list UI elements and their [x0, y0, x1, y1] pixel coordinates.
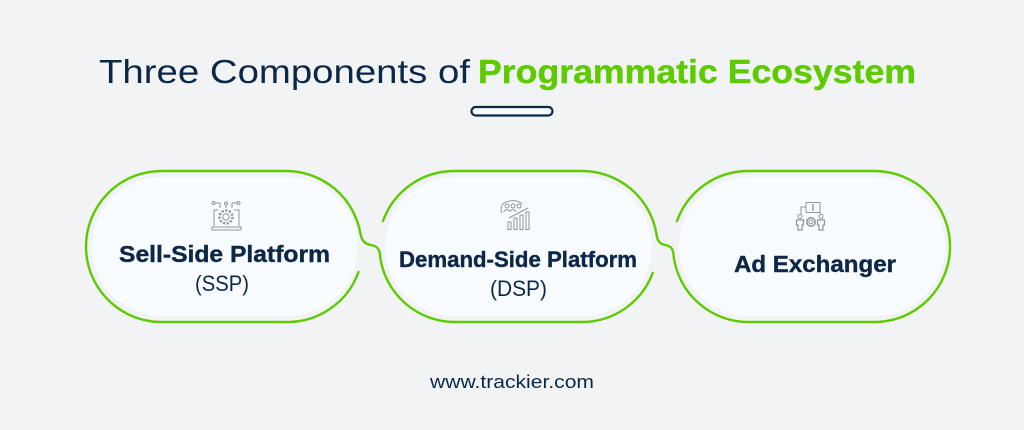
website footer: www.trackier.com	[429, 372, 594, 392]
panel: demand-side platform	[385, 177, 652, 316]
title: Three Components of	[99, 53, 471, 90]
connected green outline	[86, 171, 950, 322]
panel fill	[679, 177, 945, 316]
heading: Ad Exchanger	[734, 251, 896, 277]
heading: Sell-Side Platform	[119, 241, 330, 267]
outline: sell-side pill	[86, 171, 653, 322]
title: Programmatic Ecosystem	[478, 53, 916, 90]
icon: laptop with gear	[212, 202, 241, 230]
panel fill	[385, 177, 652, 316]
panel: ad exchanger	[679, 177, 945, 316]
subheading: (SSP)	[195, 271, 249, 296]
icon: audience and growth chart	[501, 201, 529, 230]
outline: demand-side pill	[383, 171, 950, 322]
panel: sell-side platform	[92, 177, 358, 316]
title underline pill	[472, 107, 552, 116]
title	[99, 53, 916, 90]
subheading: (DSP)	[490, 276, 547, 301]
icon: people exchanging money	[796, 202, 824, 230]
panel fill	[92, 177, 358, 316]
heading: Demand-Side Platform	[399, 247, 637, 272]
